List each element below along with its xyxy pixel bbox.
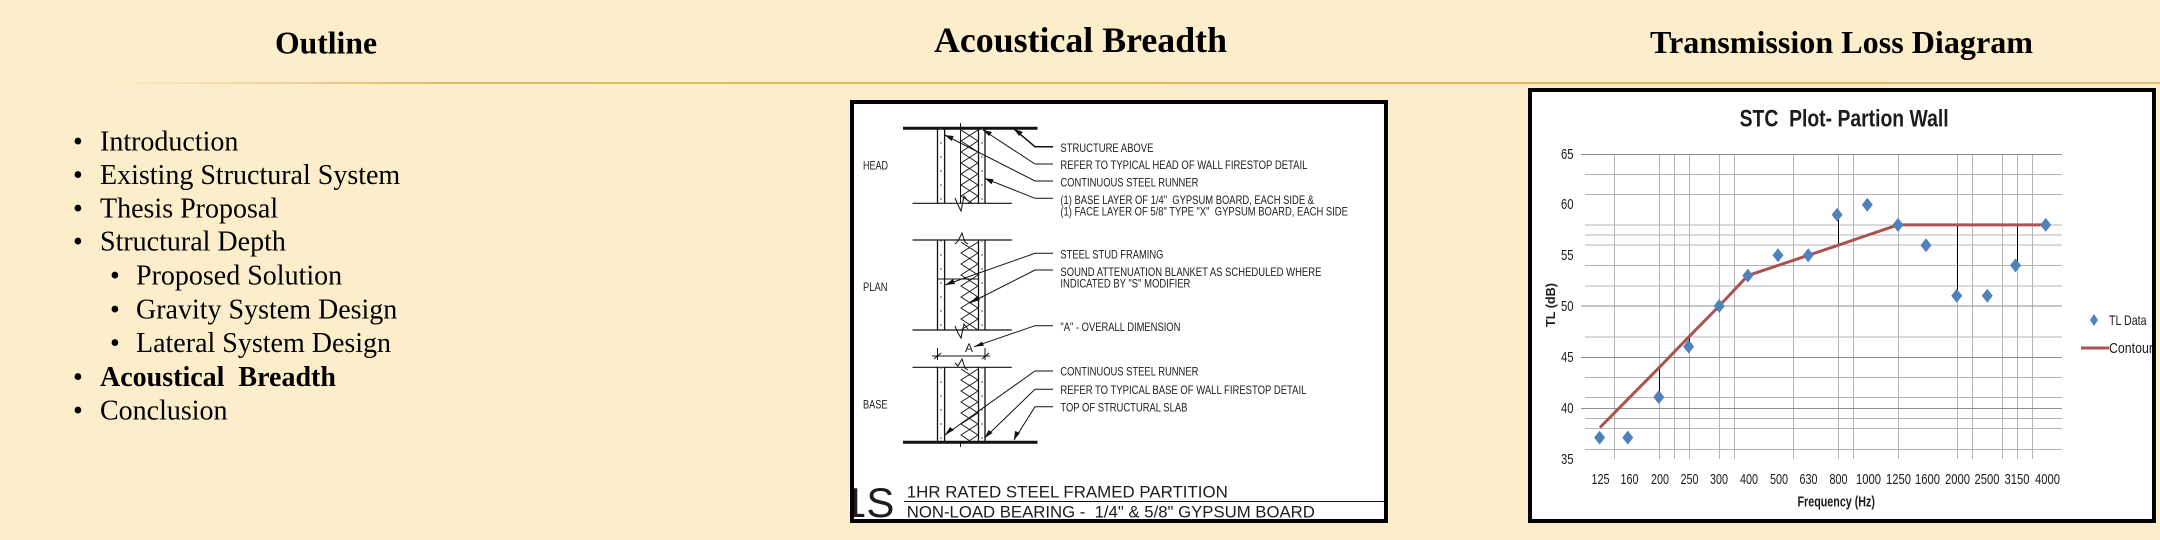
x axis labels: 500	[1770, 471, 1788, 488]
panel: outline bullet list: •	[73, 227, 83, 258]
callout labels: (1) BASE LAYER OF 1/4" GYPSUM BOARD, EACH SIDE &	[1060, 193, 1314, 207]
section labels: PLAN	[863, 280, 888, 294]
x axis labels: 800	[1830, 471, 1848, 488]
panel: outline bullet list: •	[110, 260, 120, 292]
section labels: BASE	[863, 397, 888, 411]
heading: Transmission Loss Diagram: Transmission Loss Diagram	[1650, 24, 2033, 60]
legend	[2081, 314, 2152, 353]
y axis labels: 40	[1561, 400, 1574, 417]
y axis labels: 45	[1561, 349, 1574, 366]
x axis labels: 2500	[1974, 471, 2000, 488]
panel: outline bullet list: Existing Structural System	[100, 160, 400, 191]
panel: outline bullet list: Gravity System Design	[136, 294, 397, 326]
section labels: HEAD	[863, 158, 888, 172]
y axis labels: 35	[1561, 451, 1574, 468]
x axis labels	[1592, 474, 2060, 484]
y axis title: TL (dB)	[1543, 283, 1558, 327]
callout labels: CONTINUOUS STEEL RUNNER	[1060, 364, 1199, 378]
x axis labels: 1000	[1856, 471, 1881, 488]
panel: outline bullet list: Thesis Proposal	[100, 193, 278, 224]
drawing title block: NON-LOAD BEARING - 1/4" & 5/8" GYPSUM BOARD	[907, 503, 1315, 521]
panel: outline bullet list: •	[110, 294, 120, 326]
section labels: A	[965, 341, 973, 355]
TL data points	[1594, 198, 2051, 445]
x axis labels: 630	[1800, 471, 1818, 488]
callout labels: STRUCTURE ABOVE	[1060, 141, 1153, 155]
panel: outline bullet list: •	[73, 193, 83, 224]
callout labels: STEEL STUD FRAMING	[1060, 247, 1163, 261]
x axis labels: 200	[1651, 471, 1669, 488]
callout labels: REFER TO TYPICAL BASE OF WALL FIRESTOP DETAIL	[1060, 383, 1307, 397]
x axis labels: 2000	[1945, 471, 1970, 488]
panel: outline bullet list: Proposed Solution	[136, 260, 342, 292]
panel: outline bullet list: •	[73, 127, 83, 158]
panel: STC plot chart	[1530, 90, 2154, 521]
panel: outline bullet list: •	[73, 395, 83, 426]
y axis labels: 65	[1561, 146, 1574, 163]
chart title: STC Plot- Partion Wall	[1740, 106, 1949, 133]
x axis labels: 3150	[2004, 471, 2030, 488]
y axis labels: 60	[1561, 196, 1574, 213]
x axis labels: 125	[1592, 471, 1610, 488]
x axis labels: 1600	[1915, 471, 1940, 488]
leader lines and arrows	[932, 129, 1053, 440]
x axis title: Frequency (Hz)	[1798, 494, 1875, 511]
x axis labels: 300	[1710, 471, 1728, 488]
panel: outline bullet list: •	[73, 160, 83, 191]
callout labels: CONTINUOUS STEEL RUNNER	[1060, 176, 1199, 190]
deficiency lines	[1660, 213, 2018, 397]
panel: outline bullet list: Conclusion	[100, 395, 228, 426]
legend: TL Data	[2109, 312, 2147, 328]
y axis labels	[1561, 146, 1574, 468]
contour line	[1600, 225, 2046, 428]
callout labels: "A" - OVERALL DIMENSION	[1060, 320, 1180, 334]
drawing title block: 1HR RATED STEEL FRAMED PARTITION	[907, 484, 1228, 502]
panel: outline bullet list: Acoustical Breadth	[100, 362, 336, 393]
heading: Outline: Outline	[275, 26, 377, 60]
x axis labels: 4000	[2035, 471, 2060, 488]
drawing title block: 1S	[843, 479, 894, 526]
x axis labels: 160	[1620, 471, 1638, 488]
x axis labels: 400	[1740, 471, 1758, 488]
panel: partition wall section drawing	[843, 102, 1386, 526]
callout labels: TOP OF STRUCTURAL SLAB	[1060, 400, 1187, 414]
panel: outline bullet list: •	[73, 362, 83, 393]
panel: outline bullet list: •	[110, 328, 120, 359]
panel: outline bullet list: Lateral System Design	[136, 328, 391, 359]
chart grid	[1581, 154, 2062, 459]
callout labels	[1060, 141, 1348, 414]
wall section linework	[903, 123, 1038, 447]
section labels	[863, 158, 973, 411]
panel: outline bullet list: Structural Depth	[100, 227, 286, 258]
y axis labels: 50	[1561, 298, 1574, 315]
y axis labels: 55	[1561, 247, 1574, 264]
callout labels: INDICATED BY "S" MODIFIER	[1060, 277, 1191, 291]
callout labels: REFER TO TYPICAL HEAD OF WALL FIRESTOP DETAIL	[1060, 158, 1308, 172]
drawing title block	[854, 486, 1384, 518]
panel: outline bullet list: Introduction	[100, 127, 238, 158]
panel: outline bullet list	[73, 127, 400, 426]
heading: Acoustical Breadth: Acoustical Breadth	[934, 20, 1227, 60]
callout labels: (1) FACE LAYER OF 5/8" TYPE "X" GYPSUM BOARD, EACH SIDE	[1060, 205, 1348, 219]
x axis labels: 1250	[1886, 471, 1911, 488]
callout labels: SOUND ATTENUATION BLANKET AS SCHEDULED WHERE	[1060, 265, 1321, 279]
x axis labels: 250	[1680, 471, 1698, 488]
